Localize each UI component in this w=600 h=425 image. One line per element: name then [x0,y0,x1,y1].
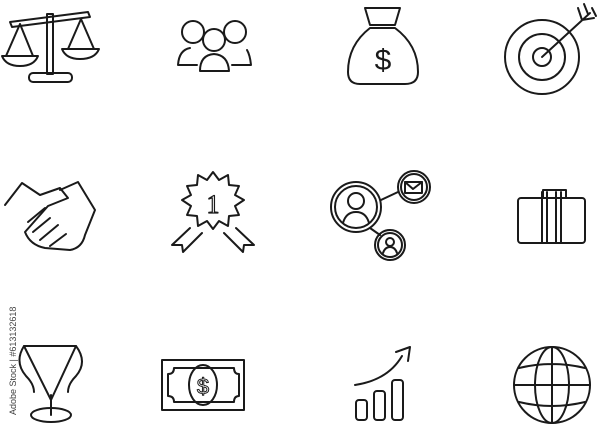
icon: money bag [348,8,418,84]
icon: handshake [5,182,95,250]
icon: scales [2,12,99,82]
icon: award ribbon: 1 [206,190,220,219]
icon: award ribbon [172,172,254,252]
icon: network [331,171,430,260]
icon: money bag: $ [375,44,392,77]
icon: trophy [19,346,82,422]
icon: target [505,4,596,94]
icon: growth chart [355,347,410,420]
watermark text: Adobe Stock | #613132618 [8,307,18,415]
icon: globe [514,347,590,423]
icon: banknote [162,360,244,410]
icon: briefcase [518,190,585,243]
icon: people group [178,21,251,71]
icon: banknote: $ [197,374,209,399]
